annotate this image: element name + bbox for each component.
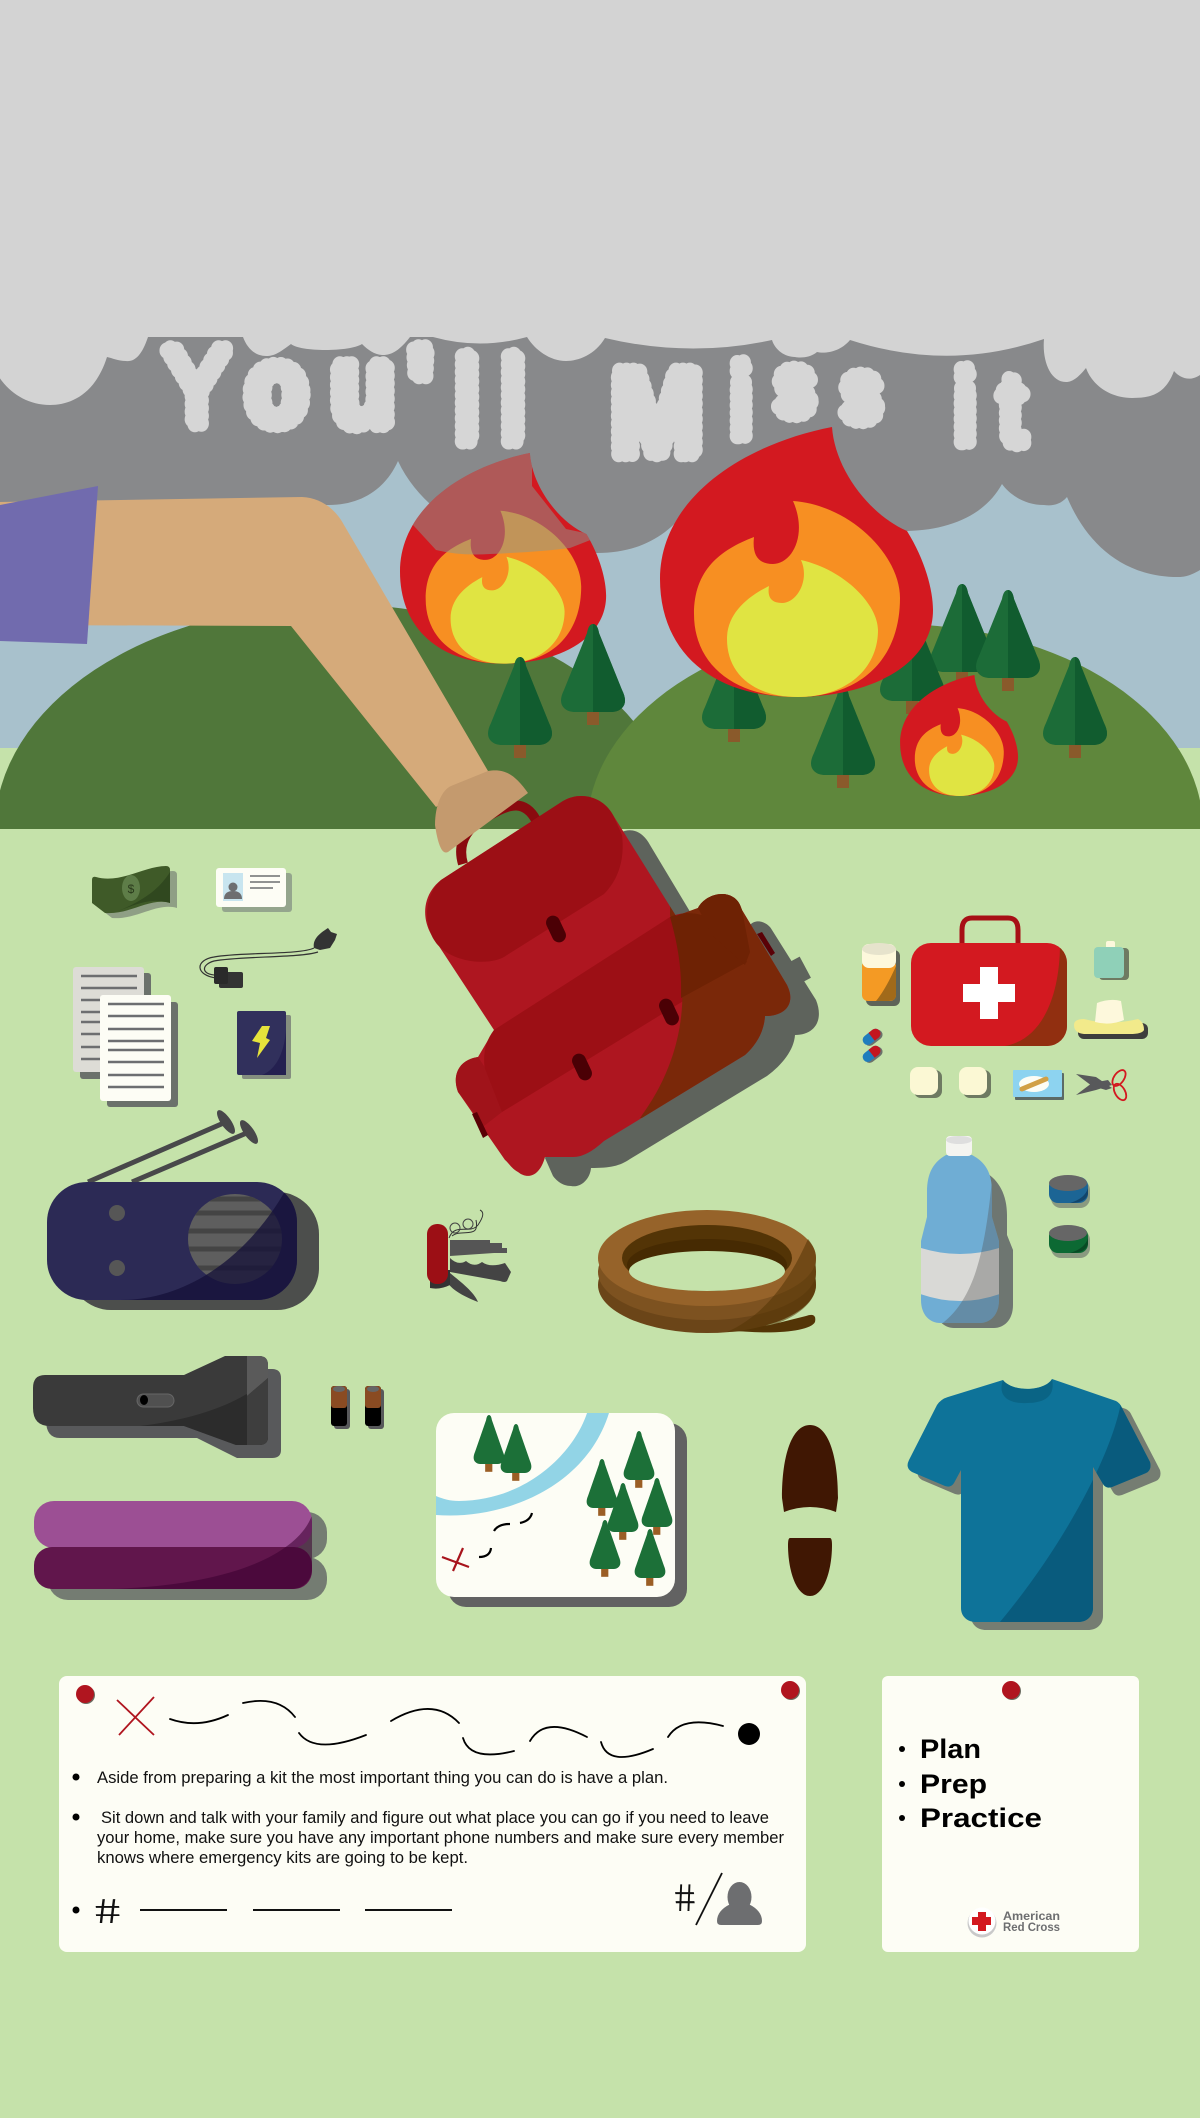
icon: t-shirt [908,1379,1160,1630]
top flap [427,796,623,962]
hand [435,770,528,853]
bullet text [72,1768,784,1867]
large flame [660,427,933,697]
icon: ID card [216,868,292,912]
title: cloud lettering: l [501,334,555,467]
bullet text: Sit down and talk with your family and figure out what place you can go if you need to leave [101,1808,769,1827]
icon: trail map [436,1413,687,1607]
trees in front of left flame [488,624,625,758]
icon: shoe prints [782,1425,838,1596]
bullet text: your home, make sure you have any important phone numbers and make sure every member [97,1828,784,1847]
straps [544,913,568,945]
icon: cash [92,866,177,918]
title: cloud lettering: M [611,344,703,480]
route destination dot [738,1723,760,1745]
icon: flashlight [33,1356,281,1458]
list: Plan [920,1734,981,1764]
phone number blanks: # [92,1892,124,1931]
trees behind flames [702,584,1107,788]
icon: pill bottle and capsules [861,943,900,1066]
title: cloud lettering: s [776,339,814,433]
background: sky [0,0,1200,748]
bullet text: Aside from preparing a kit the most important thing you can do is have a plan. [97,1768,668,1787]
title: cloud lettering: i [731,345,751,458]
list: Practice [920,1803,1042,1833]
logo: American Red Cross [968,1908,1060,1938]
title: cloud lettering: l [455,334,479,467]
icon: gauze rolls [910,1067,991,1098]
icon: bandage box [1013,1070,1064,1100]
arm reaching for bag [0,497,488,807]
icon: charging cable [200,928,337,988]
icon: water bottle [915,1136,1013,1328]
title: cloud lettering: s [842,345,902,439]
dark smoke cloud [0,300,1200,577]
left pocket [456,1057,502,1126]
icon: food cans [1049,1175,1090,1258]
title: cloud lettering: Y [164,326,230,448]
phone number blanks [72,1892,452,1931]
small flame [900,675,1018,796]
pins [76,1681,800,1704]
lower flap [484,913,747,1112]
river [436,1413,609,1516]
list: Prep [920,1769,987,1799]
backpack handle [461,805,536,864]
backpack [425,796,810,1176]
left flame [400,453,606,664]
hills [0,604,1200,829]
icon: power bank [237,1011,291,1079]
pin [1002,1681,1021,1700]
shadow of backpack [545,830,819,1186]
logo: American Red Cross: Red Cross [1003,1920,1060,1934]
route map X [117,1697,154,1735]
icon: tissue box [1074,1000,1148,1039]
title: cloud lettering: ' [408,324,433,451]
title: cloud lettering: i [955,351,975,464]
icon: first aid kit [911,918,1070,1050]
light smoke cloud top [0,0,1200,405]
panel: plan prep practice [882,1676,1139,1952]
smoke overlay on left flame [413,453,590,554]
icon: documents [73,967,178,1107]
icon: sleeping mat [34,1501,327,1600]
icon: small antiseptic bottle [1094,941,1129,980]
title: cloud lettering: u [331,322,395,450]
dashed route line [170,1701,723,1757]
title: cloud lettering: t [1000,354,1025,465]
icon: cash: $ [128,882,135,896]
logo: American Red Cross: American [1003,1909,1060,1923]
icon: multi-tool knife [427,1210,511,1302]
bullet text: knows where emergency kits are going to be kept. [97,1848,468,1867]
icon: coiled rope [598,1210,816,1333]
title: cloud lettering: o [246,326,307,448]
sleeve [0,486,98,644]
icon: number per person [671,1873,762,1925]
icon: number per person: # [671,1876,699,1920]
icon: scissors [1076,1068,1129,1102]
panel: plan note [59,1676,806,1952]
icon: batteries [331,1386,384,1429]
list [899,1734,1042,1833]
icon: crank radio [47,1108,319,1310]
shaded right side [640,894,790,1118]
